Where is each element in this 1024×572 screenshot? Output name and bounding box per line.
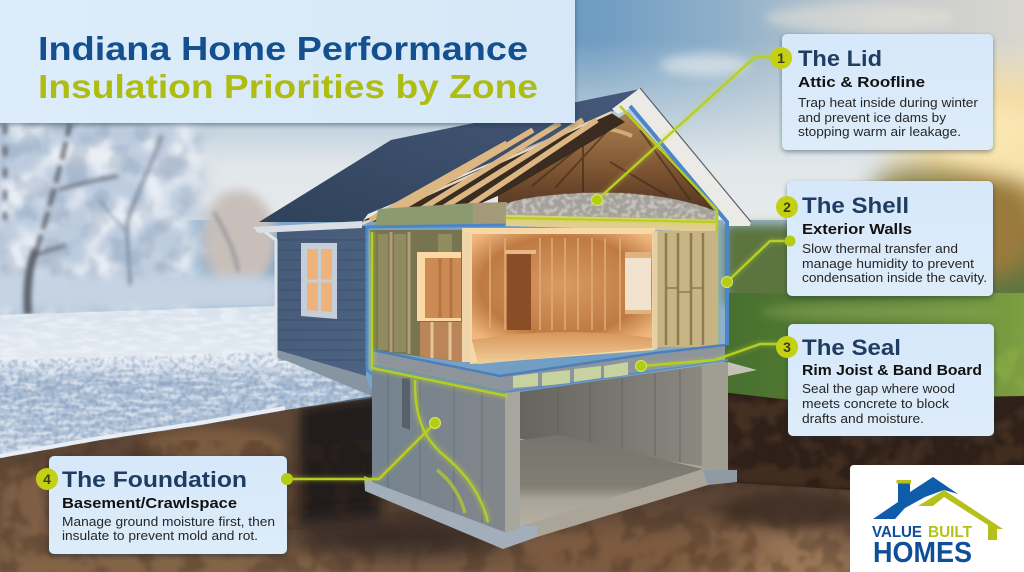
green zone outlines: [372, 218, 717, 522]
card 3 body: drafts and moisture.: [802, 412, 924, 426]
blue envelope lines: [367, 225, 505, 374]
side window: [301, 243, 337, 319]
ground: [0, 420, 1024, 572]
card 4 body: [62, 515, 275, 543]
house illustration: [253, 88, 757, 549]
card 2 body: [802, 242, 987, 285]
badge 3: [776, 336, 798, 358]
rafters: [362, 112, 625, 224]
downspout: [265, 232, 276, 360]
card 2: the shell: [776, 181, 993, 296]
card 4: the foundation: [36, 456, 293, 554]
room interior: [462, 228, 655, 364]
left soil bank: [0, 396, 510, 572]
right trees: [725, 128, 1024, 305]
logo wordmark: [872, 524, 973, 569]
card 4 body: insulate to prevent mold and rot.: [62, 529, 258, 543]
badge 1: 1: [777, 50, 785, 66]
card 2 heading: The Shell: [802, 193, 909, 218]
right soil bank: [680, 392, 1024, 572]
badge 4: [36, 468, 58, 490]
leader: shell: [727, 241, 790, 282]
grass: [725, 293, 1024, 403]
card 1 body: and prevent ice dams by: [798, 111, 947, 125]
card 3 body: meets concrete to block: [802, 397, 950, 411]
leader: foundation: [287, 423, 435, 479]
logo house mark: [873, 477, 1003, 540]
card 1 heading: The Lid: [798, 46, 882, 71]
card 3 subheading: Rim Joist & Band Board: [802, 362, 982, 379]
card 3 heading: The Seal: [802, 335, 901, 360]
gable fascia: [612, 88, 751, 348]
card 1 body: stopping warm air leakage.: [798, 125, 961, 139]
leader: lid: [597, 57, 782, 200]
card 2 body: Slow thermal transfer and: [802, 242, 958, 256]
left wall opening: [417, 252, 461, 321]
frosted trees: [0, 123, 280, 315]
card 2 subheading: Exterior Walls: [802, 221, 912, 238]
card 3 body: Seal the gap where wood: [802, 382, 955, 396]
right wall batts: [654, 231, 718, 349]
roof: [259, 89, 640, 222]
blown attic insulation: [506, 193, 717, 220]
card 2 body: condensation inside the cavity.: [802, 271, 987, 285]
top plate blocks: [375, 203, 473, 226]
title panel: [0, 0, 575, 123]
left wall section: [370, 230, 462, 362]
leader: seal: [641, 344, 788, 366]
badge 4: 4: [43, 471, 51, 487]
leader lines and markers: [287, 57, 790, 479]
shell leader end dot: [784, 236, 796, 246]
badge 2: [776, 196, 798, 218]
attic cavity: [498, 112, 717, 215]
foundation: near wall: [372, 366, 507, 533]
foreground dirt highlights: [0, 440, 1024, 572]
side wall with siding: [277, 226, 366, 376]
floor rim and band: [372, 345, 728, 392]
card 4 body: Manage ground moisture first, then: [62, 515, 275, 529]
card 1: the lid: [770, 34, 993, 150]
card 4 subheading: Basement/Crawlspace: [62, 495, 237, 512]
title line 1: Indiana Home Performance: [38, 30, 528, 67]
rim insulation blocks: [513, 362, 628, 388]
card 4 heading: The Foundation: [62, 467, 247, 492]
title line 2: Insulation Priorities by Zone: [38, 68, 538, 105]
badge 2: 2: [783, 199, 791, 215]
logo wordmark: HOMES: [873, 537, 972, 569]
snow field: [0, 306, 372, 458]
card 1 body: Trap heat inside during winter: [798, 96, 978, 110]
card 3: the seal: [776, 324, 994, 436]
card 2 body: manage humidity to prevent: [802, 257, 975, 271]
card 3 body: [802, 382, 955, 426]
logo wordmark: BUILT: [928, 524, 973, 541]
ceiling beam: [506, 215, 717, 232]
foundation: back walls and slab: [364, 362, 757, 549]
foundation leader end dot: [281, 473, 293, 485]
logo wordmark: VALUE: [872, 524, 922, 541]
badge 3: 3: [783, 339, 791, 355]
badge 1: [770, 47, 792, 69]
logo panel: [850, 465, 1024, 572]
card 1 subheading: Attic & Roofline: [798, 74, 925, 91]
card 1 body: [798, 96, 978, 139]
